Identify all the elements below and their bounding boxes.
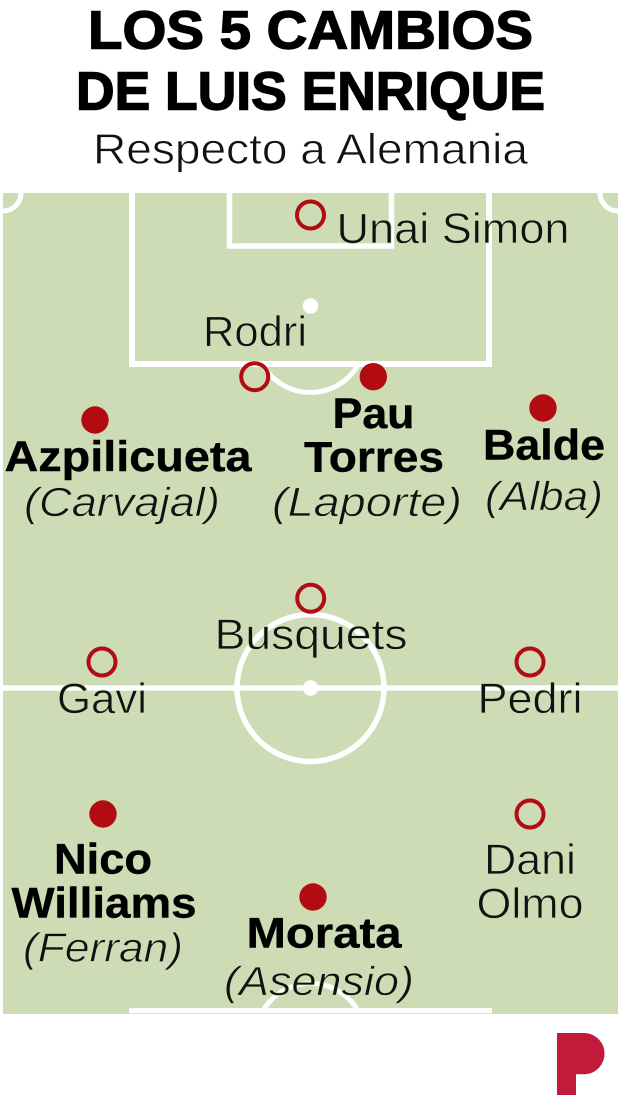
player: Nico Williams: (Ferran) xyxy=(23,924,183,970)
player: Nico Williams: Williams xyxy=(12,880,196,928)
player: Azpilicueta: (Carvajal) xyxy=(24,479,220,525)
player: Pedri: Pedri xyxy=(478,675,582,723)
player: Unai Simon: Unai Simon xyxy=(336,205,570,253)
player: Pedri xyxy=(478,648,582,723)
player: Rodri xyxy=(203,308,307,390)
player: Nico Williams xyxy=(12,800,196,970)
subtitle: Respecto a Alemania xyxy=(93,126,528,174)
player: Busquets: Busquets xyxy=(214,611,408,659)
player: Azpilicueta: Azpilicueta xyxy=(4,433,253,481)
player: Pau Torres: Pau xyxy=(332,390,414,438)
player: Pau Torres: Torres xyxy=(304,434,444,482)
player: Nico Williams: Nico xyxy=(54,836,152,884)
player: Balde: Balde xyxy=(483,422,605,470)
player: Pau Torres: (Laporte) xyxy=(272,479,462,525)
player: Balde xyxy=(483,394,605,519)
player: Dani Olmo: Dani xyxy=(484,836,576,884)
player: Dani Olmo xyxy=(476,800,584,928)
panel: football pitch xyxy=(3,193,618,1014)
player: Pau Torres xyxy=(272,363,462,525)
player: Gavi: Gavi xyxy=(57,675,147,723)
icon: red P logo xyxy=(557,1033,605,1095)
player: Busquets xyxy=(214,585,408,659)
player: Morata: (Asensio) xyxy=(224,958,414,1004)
player: Morata: Morata xyxy=(246,910,403,958)
player: Azpilicueta xyxy=(4,406,253,525)
player: Balde: (Alba) xyxy=(485,473,603,519)
title: DE LUIS ENRIQUE xyxy=(76,62,545,122)
player: Rodri: Rodri xyxy=(203,308,307,356)
player: Morata xyxy=(224,883,414,1004)
title xyxy=(76,0,545,122)
player: Gavi xyxy=(57,648,147,723)
title: LOS 5 CAMBIOS xyxy=(88,0,533,60)
player: Dani Olmo: Olmo xyxy=(476,880,584,928)
